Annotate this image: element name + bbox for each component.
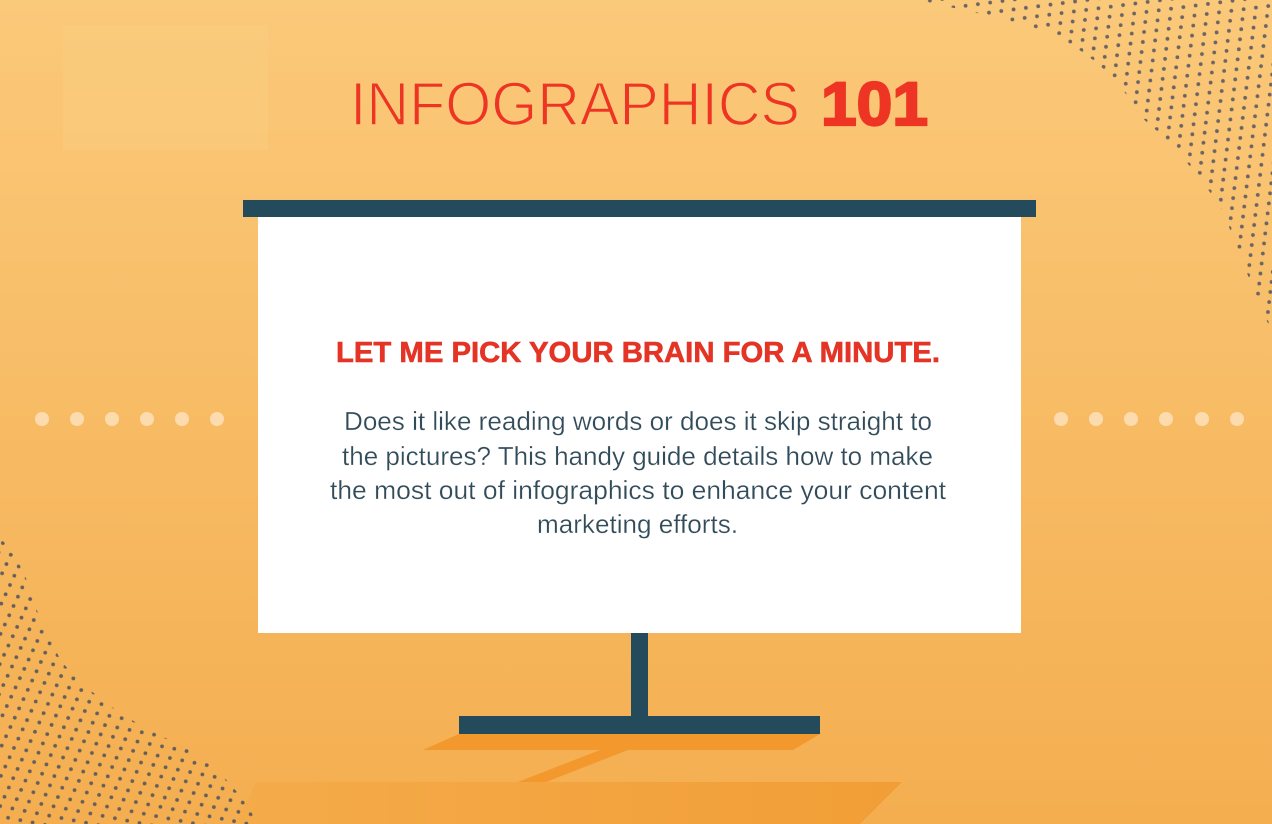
screen panel <box>258 217 1021 633</box>
projector screen <box>243 200 1036 633</box>
title: bold number: 101 <box>821 70 928 138</box>
screen top bar <box>243 200 1036 217</box>
projector stand <box>459 633 820 734</box>
dotted line: right <box>1054 412 1244 426</box>
dotted line: left <box>35 412 224 426</box>
title: light word: INFOGRAPHICS <box>350 70 800 138</box>
decorative pale square <box>63 25 268 150</box>
halftone dots: top right <box>918 0 1272 332</box>
title <box>350 70 928 138</box>
stand shadow <box>423 734 820 782</box>
screen body text: the most out of infographics to enhance your content <box>330 475 947 505</box>
screen body text: Does it like reading words or does it skip straight to <box>344 406 932 436</box>
screen body text: marketing efforts. <box>537 509 738 539</box>
halftone dots: bottom left <box>0 538 258 824</box>
screen body text: the pictures? This handy guide details how to make <box>342 441 933 471</box>
screen heading: LET ME PICK YOUR BRAIN FOR A MINUTE. <box>336 337 940 369</box>
screen body text <box>330 406 947 539</box>
stand pole <box>631 633 648 718</box>
floor shadow <box>236 782 902 824</box>
stand base <box>459 716 820 734</box>
